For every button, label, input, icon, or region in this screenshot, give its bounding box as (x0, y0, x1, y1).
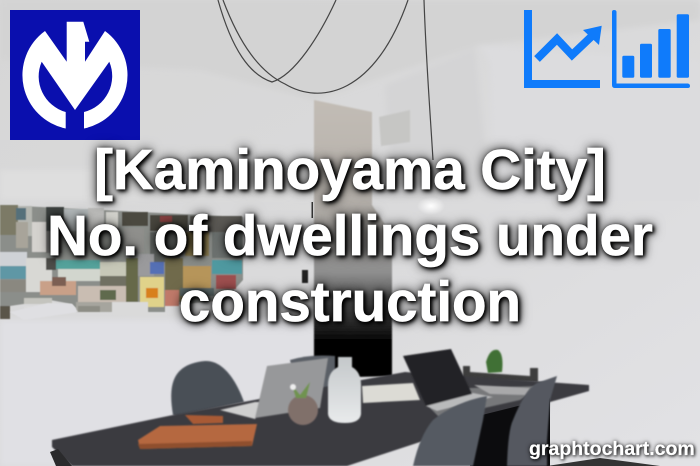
bar 3 (658, 29, 671, 78)
logo mark (22, 22, 128, 129)
title: [Kaminoyama City] (94, 138, 606, 201)
papers (362, 383, 420, 403)
laptop one (220, 358, 328, 419)
front chair left (413, 396, 487, 466)
folio (138, 424, 257, 449)
glass bottle (328, 357, 361, 423)
site credit: graphtochart.com (529, 438, 695, 460)
collage lower wall cut-out (10, 303, 78, 320)
door handle (302, 270, 308, 283)
ceiling lamp glow (417, 197, 445, 215)
photo collage on wall (0, 205, 243, 319)
title: construction (179, 270, 521, 333)
logo square (10, 10, 140, 140)
wallet (185, 415, 223, 424)
line chart axes (524, 10, 600, 88)
bar chart axes (612, 10, 690, 88)
door edge (312, 202, 313, 218)
bar 1 (622, 56, 634, 78)
doorway (314, 100, 392, 378)
line chart trend line (537, 36, 592, 59)
title: No. of dwellings under (47, 204, 653, 267)
left chair (171, 361, 244, 416)
shadow under table (470, 398, 550, 466)
bar 2 (640, 44, 652, 78)
bar 4 (677, 14, 689, 78)
potted plant on back (486, 350, 502, 373)
notebook on table (474, 385, 530, 395)
front chair right (507, 376, 557, 466)
hanging wires (218, 0, 433, 160)
table (52, 372, 589, 466)
wall mounted box (379, 110, 410, 146)
rear chair (290, 356, 335, 400)
table top reflection by laptop (430, 386, 540, 418)
laptop two (403, 349, 493, 411)
rear chair right (463, 366, 538, 382)
line chart arrowhead (583, 26, 602, 45)
glass bowl plant (288, 382, 318, 425)
footer floor shadow (547, 458, 660, 466)
title (42, 138, 661, 333)
table leg (50, 449, 72, 466)
